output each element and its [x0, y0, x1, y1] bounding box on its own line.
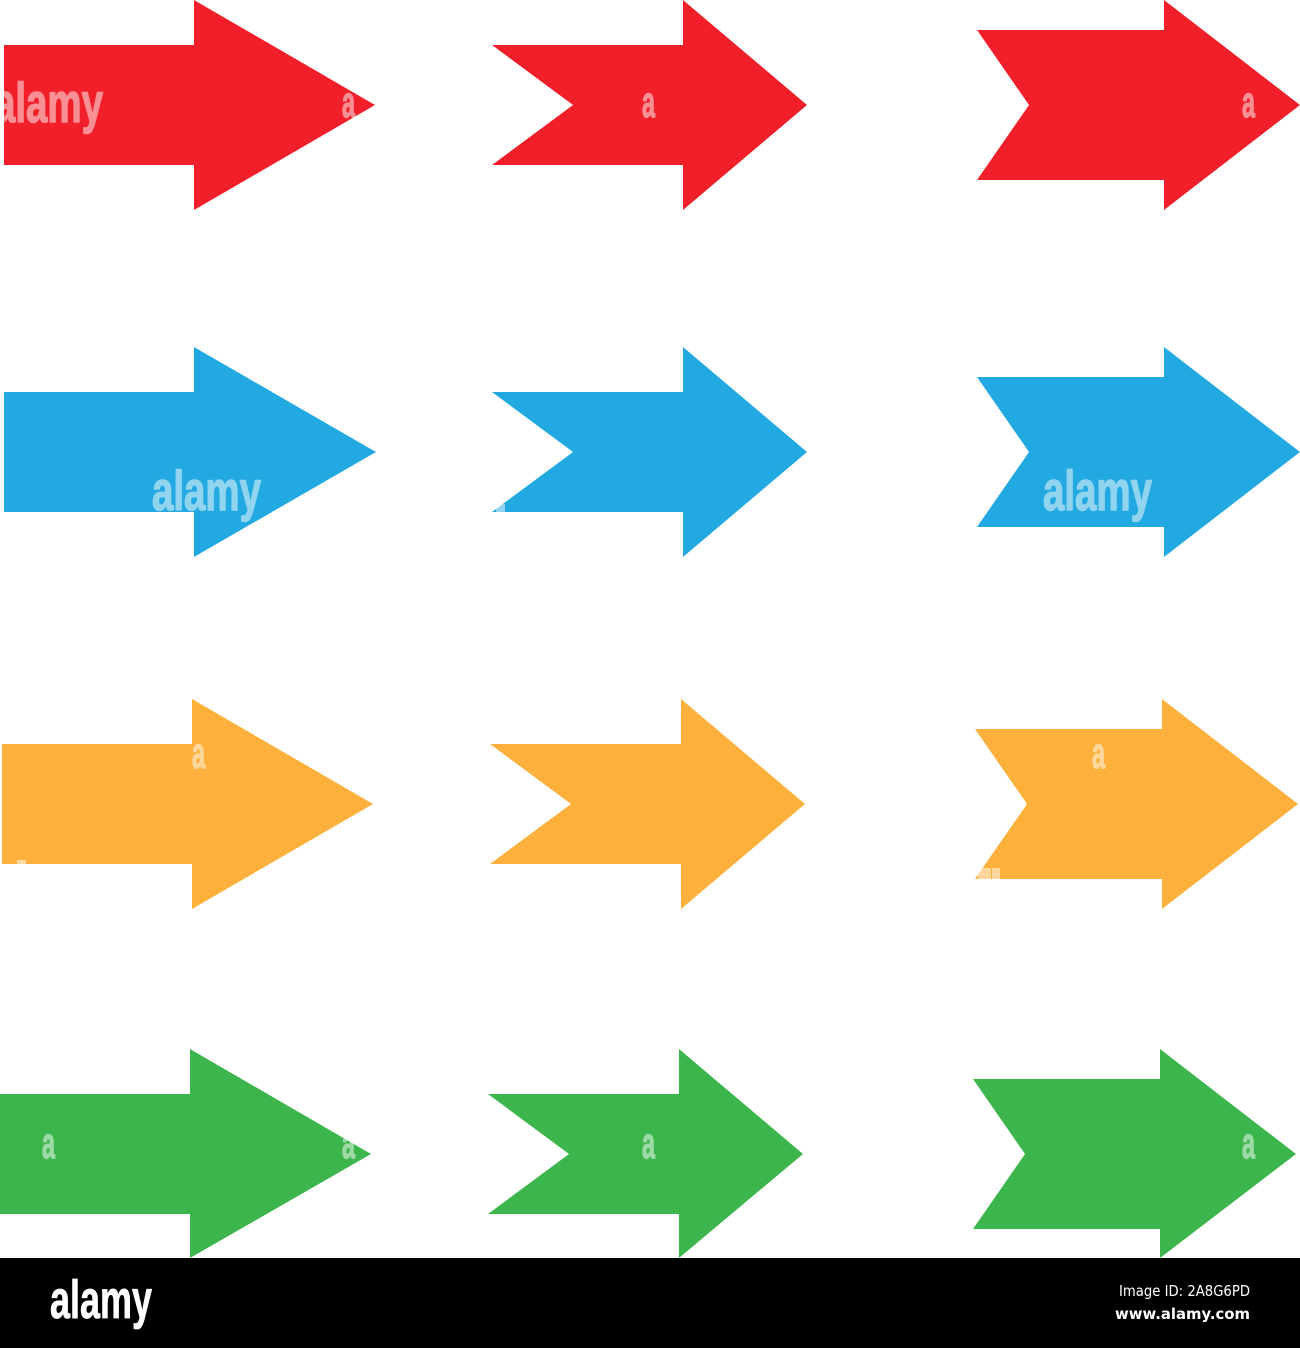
footer url: www.alamy.com [1115, 1305, 1250, 1323]
watermark: green row: a [42, 1119, 55, 1168]
arrow: orange wide notched [975, 699, 1298, 909]
watermark: blue row: alamy [1043, 459, 1152, 522]
watermark: red row: a [342, 78, 355, 127]
watermark: red row: a [1242, 78, 1255, 127]
arrow: red wide notched [977, 0, 1300, 210]
arrow: orange flat tail [2, 699, 373, 909]
watermark: blue row [152, 459, 1152, 522]
arrow: red flat tail [4, 0, 375, 210]
arrow: orange notched [490, 699, 805, 909]
row: green arrows [0, 1049, 1296, 1258]
watermark: orange row: a [192, 729, 205, 778]
arrow: blue notched [492, 347, 807, 557]
watermark: red row [0, 71, 1255, 134]
image id: Image ID: 2A8G6PD [1119, 1282, 1250, 1300]
row: red arrows [0, 0, 1300, 210]
watermark: orange row [17, 729, 1105, 879]
row: blue arrows [4, 347, 1300, 557]
arrow: red notched [492, 0, 807, 210]
watermark: green row: a [642, 1119, 655, 1168]
arrow: green notched [488, 1049, 803, 1258]
watermark: green row [42, 1119, 1255, 1168]
arrow: blue flat tail [4, 347, 376, 557]
watermark: orange row: a [1092, 729, 1105, 778]
row: orange arrows [2, 699, 1298, 909]
arrow: green flat tail [0, 1049, 371, 1258]
watermark: green row: a [342, 1119, 355, 1168]
footer bar [0, 1258, 1300, 1348]
watermark: red row: a [642, 78, 655, 127]
footer logo: alamy [50, 1270, 152, 1330]
watermark: green row: a [1242, 1119, 1255, 1168]
watermark: blue row: alamy [152, 459, 261, 522]
arrow: blue wide notched [977, 347, 1300, 557]
arrow: green wide notched [973, 1049, 1296, 1258]
